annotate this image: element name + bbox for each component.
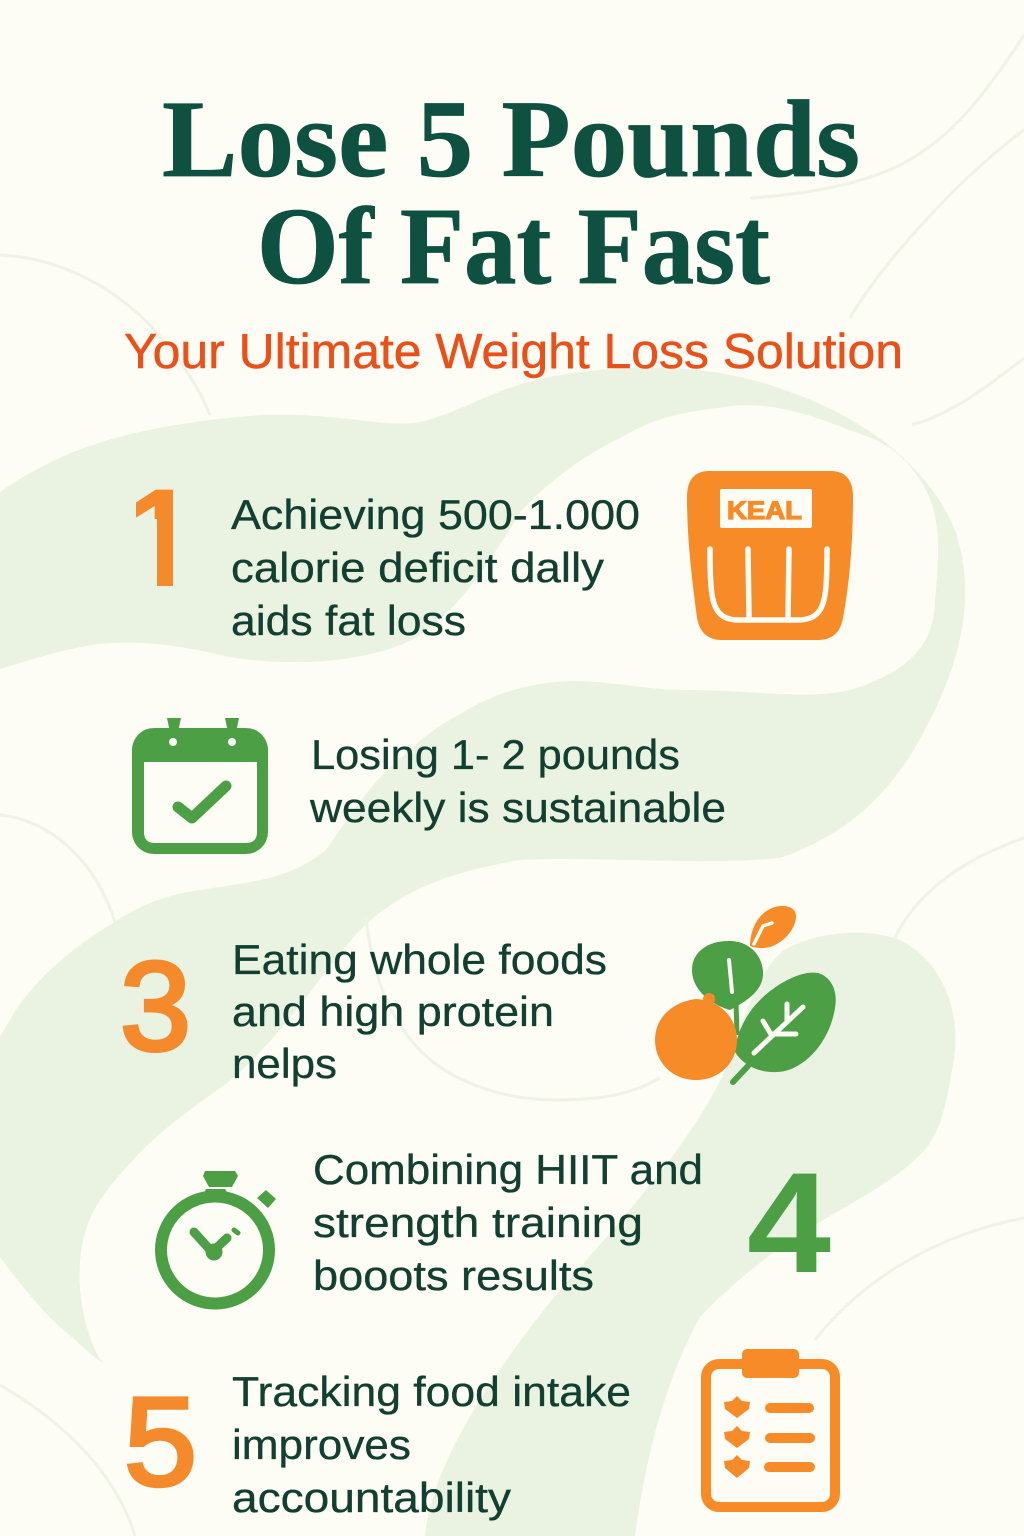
number 4: 4 [747, 1144, 831, 1303]
step 3 text: and high protein [232, 988, 554, 1035]
icon: calendar [132, 718, 268, 854]
number 3: 3 [120, 936, 191, 1077]
step 3 text: Eating whole foods [232, 936, 607, 983]
number 5: 5 [124, 1371, 197, 1512]
icon: whole foods [655, 906, 836, 1082]
step 4 text: strength training [313, 1199, 643, 1246]
icon: scale [687, 471, 853, 640]
icon: stopwatch [161, 1171, 276, 1304]
step 5 text [232, 1368, 631, 1521]
step 5 text: Tracking food intake [232, 1368, 631, 1415]
step 4 text: Combining HIIT and [313, 1146, 703, 1193]
step 1 text: aids fat loss [231, 597, 466, 644]
step 2 text [309, 731, 726, 831]
step 3 text [232, 936, 607, 1087]
step 5 [124, 1349, 835, 1521]
step 2 [132, 718, 726, 854]
step 2 text: weekly is sustainable [309, 784, 726, 831]
step 4 [161, 1144, 831, 1304]
title: Lose 5 Pounds [162, 78, 860, 200]
step 5 text: improves [232, 1421, 411, 1468]
step 3 [120, 906, 836, 1087]
title [162, 78, 860, 307]
step 1 text: Achieving 500-1.000 [231, 491, 640, 538]
number 1: 1 [122, 459, 200, 616]
title: Of Fat Fast [257, 185, 770, 307]
step 1 text [231, 491, 640, 644]
subtitle: Your Ultimate Weight Loss Solution [124, 325, 903, 379]
step 4 text [313, 1146, 703, 1299]
step 5 text: accountability [232, 1474, 511, 1521]
icon: scale: KEAL [727, 497, 802, 525]
icon: clipboard checklist [706, 1349, 835, 1507]
step 4 text: booots results [313, 1252, 594, 1299]
step 2 text: Losing 1- 2 pounds [311, 731, 680, 778]
step 1 [136, 471, 853, 640]
step 3 text: nelps [232, 1040, 337, 1087]
step 1 text: calorie deficit dally [231, 544, 604, 591]
